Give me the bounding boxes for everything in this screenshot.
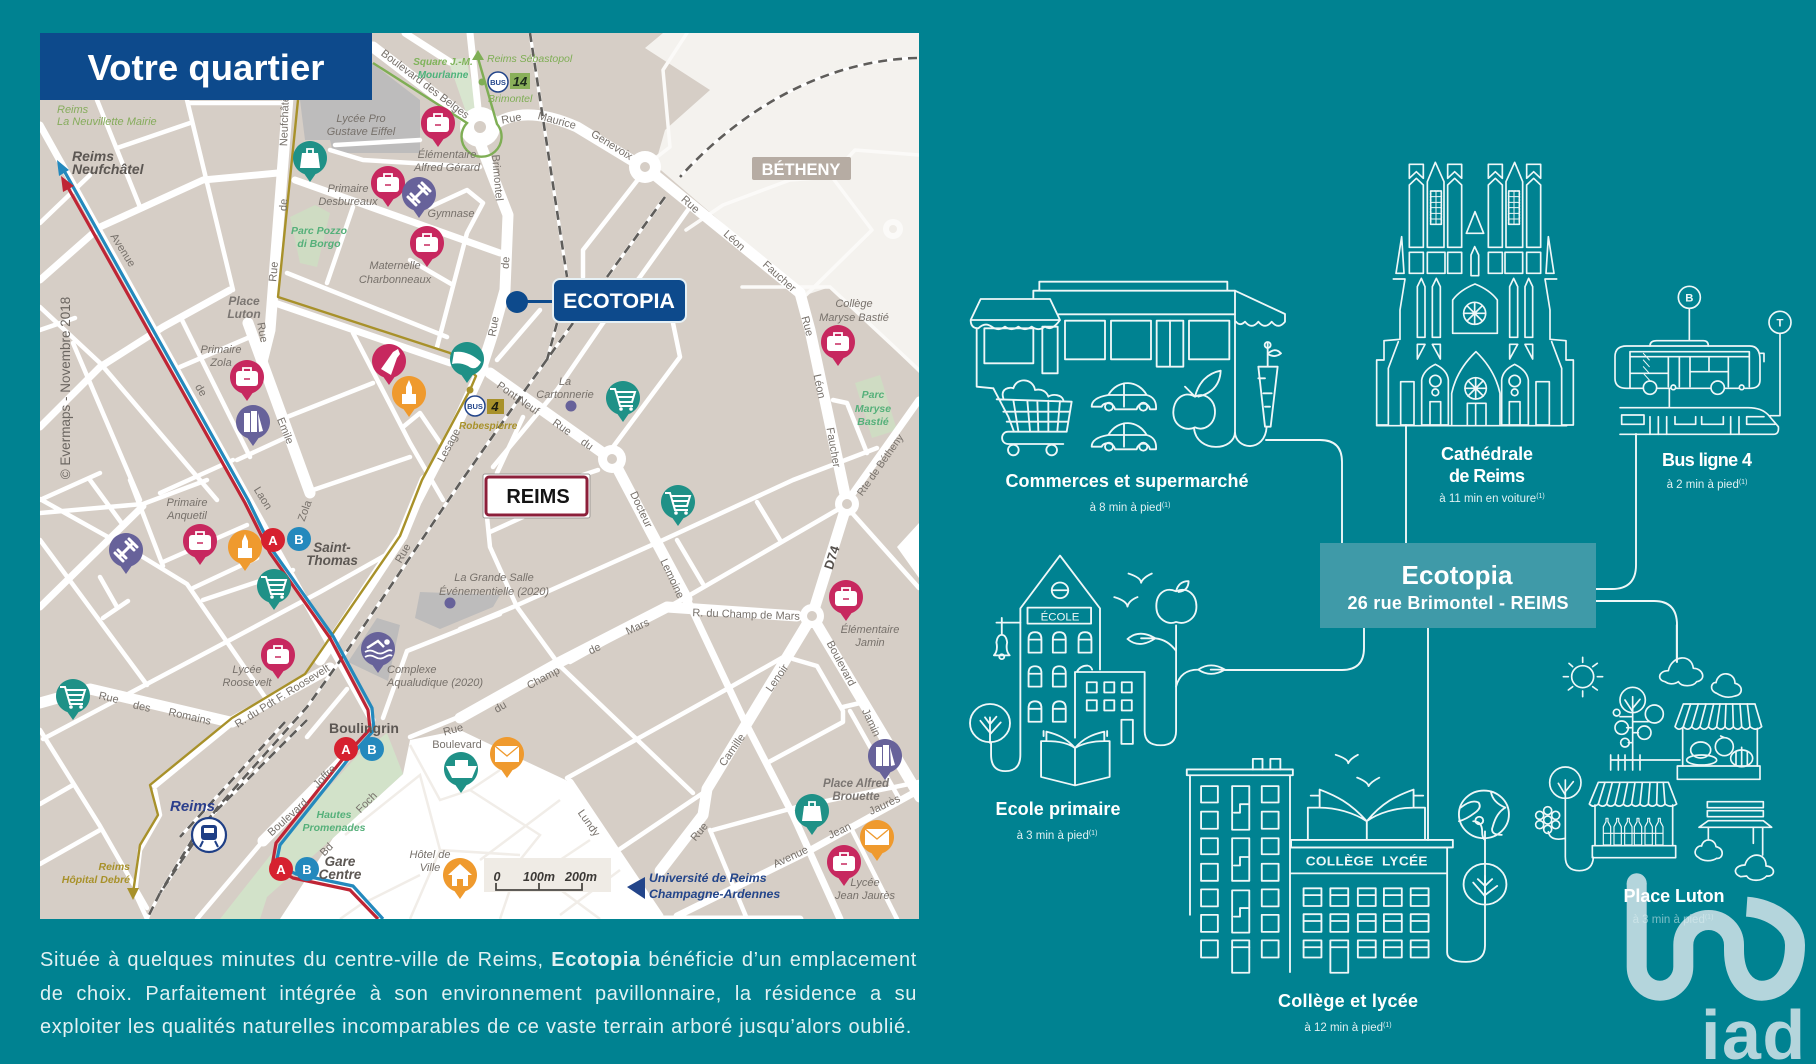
central address box: 26 rue Brimontel - REIMS <box>1348 593 1568 613</box>
street names: Joffre <box>311 763 339 791</box>
university arrow: Champagne-Ardennes <box>649 887 780 901</box>
tram stop badges: B <box>302 862 312 877</box>
street names: Rue <box>254 321 270 343</box>
street names: de <box>278 199 290 211</box>
place labels: Complexe <box>387 664 437 676</box>
label: college and high school: Collège et lycée <box>1278 991 1418 1011</box>
pin: market hall <box>444 752 478 793</box>
bus stop 4 <box>465 396 504 416</box>
district and stop labels: Place Alfred <box>823 778 890 790</box>
pins: schools <box>183 59 863 886</box>
street names: de <box>587 641 603 657</box>
label: shops <box>1006 471 1248 514</box>
text block: description: de choix. Parfaitement intégrée à son environnement pavillonnaire, la résidence a su <box>40 983 917 1005</box>
connector lines <box>1225 425 1677 840</box>
street names: Jaurès <box>867 793 903 818</box>
place labels: Événementielle (2020) <box>439 585 549 598</box>
pin: croissant <box>450 342 484 383</box>
central address box <box>1320 543 1596 628</box>
bus stop dots <box>466 386 474 394</box>
road label D74: D74 <box>821 543 843 571</box>
area: lycée grounds <box>300 63 420 153</box>
tram stop badges: B <box>294 532 304 547</box>
scale bar: 0 <box>494 870 501 884</box>
district and stop labels: Luton <box>227 307 261 321</box>
Bétheny label: BÉTHENY <box>762 160 840 179</box>
place labels <box>166 113 899 902</box>
street names: Genevoix <box>589 128 635 163</box>
street names: Pont Neuf <box>494 380 542 418</box>
place labels: Charbonneaux <box>359 274 432 286</box>
street names: Camille <box>717 732 748 769</box>
park and square labels: Square J.-M. <box>413 57 473 68</box>
street names: Lundy <box>575 808 602 839</box>
label: cathedral: Cathédrale <box>1441 444 1533 464</box>
line terminus labels <box>57 53 573 886</box>
label: bus: à 2 min à pied <box>1667 479 1739 491</box>
place labels: Lycée Pro <box>336 113 386 125</box>
street names: Brimontel <box>489 154 505 201</box>
street names: Boulevard <box>432 739 482 751</box>
district and stop labels: Neufchâtel <box>72 161 145 177</box>
label: college and high school <box>1278 991 1418 1034</box>
place labels: Desbureaux <box>318 196 378 208</box>
place labels: Élémentaire <box>841 623 899 636</box>
park and square labels: Mourlanne <box>418 70 469 81</box>
text block: description: exploiter les qualités naturelles incomparables de ce vaste terrain arboré jusqu’alors oublié. <box>40 1016 912 1038</box>
bus line 4 arrow <box>127 888 139 900</box>
street names: Faucher <box>824 427 842 469</box>
icon: cathedral <box>1377 162 1573 426</box>
tram stop badges: B <box>367 742 377 757</box>
street names: Léon <box>811 373 827 400</box>
label: cathedral: de Reims <box>1449 466 1525 486</box>
central address box: Ecotopia <box>1402 560 1513 590</box>
street names: Léon <box>721 228 747 253</box>
bus stop 4: BUS <box>467 402 483 411</box>
label: Place Luton: Place Luton <box>1624 886 1724 906</box>
line terminus labels: La Neuvillette Mairie <box>57 116 157 128</box>
place labels: Lycée <box>232 664 262 676</box>
bus line 14 route <box>373 58 502 157</box>
district and stop labels: Thomas <box>306 553 358 568</box>
pin: pharmacy bottle <box>372 344 406 385</box>
street names: Rue <box>442 722 465 739</box>
place labels: Jean Jaurès <box>834 890 895 902</box>
line terminus labels: Reims Sébastopol <box>487 53 573 65</box>
street names: Rue <box>486 315 502 337</box>
tram arrow red <box>61 176 74 192</box>
street names: Zola <box>296 498 315 523</box>
street names: Jamin <box>859 707 882 739</box>
street names: Lemoine <box>657 557 686 600</box>
icon: primary school <box>970 556 1225 785</box>
street names: Boulevard <box>266 797 310 839</box>
street names: Boulevard <box>824 639 858 688</box>
street names: des <box>132 699 152 715</box>
street names: Avenue <box>108 231 137 269</box>
place labels: Lycée <box>850 877 880 889</box>
train station: Reims <box>170 798 215 815</box>
place labels: Zola <box>209 357 232 369</box>
scale bar <box>484 858 611 892</box>
park and square labels: di Borgo <box>297 238 341 250</box>
place labels: La Grande Salle <box>454 572 534 584</box>
pin: town hall <box>443 858 477 899</box>
tram arrow blue <box>57 160 69 176</box>
label: shops: (1) <box>1162 502 1170 509</box>
icon: Place Luton market <box>1536 625 1773 880</box>
street names: Bd <box>318 841 336 859</box>
street names: Maurice <box>536 110 577 132</box>
label: primary school: à 3 min à pied <box>1017 830 1089 842</box>
place labels: Élémentaire <box>418 148 476 161</box>
Bétheny label <box>752 157 851 180</box>
tram stop badges: A <box>276 862 286 877</box>
area: parc Pozzo di Borgo <box>290 205 330 267</box>
bus stop 14 <box>478 72 530 92</box>
bus stop 14: 14 <box>513 74 528 89</box>
Ecotopia marker: ECOTOPIA <box>563 289 675 313</box>
roundabouts <box>460 107 903 628</box>
place labels: Primaire <box>167 497 207 509</box>
district and stop labels <box>72 148 890 882</box>
district and stop labels: Saint- <box>313 540 351 555</box>
place labels: Maternelle <box>369 260 421 272</box>
tram stop badges: A <box>341 742 351 757</box>
label: cathedral <box>1439 444 1545 505</box>
street names: Docteur <box>627 490 654 530</box>
label: Place Luton: (1) <box>1705 914 1713 921</box>
street names: Rue <box>267 261 281 282</box>
label: bus: (1) <box>1739 479 1747 486</box>
street names: Jean <box>826 821 853 842</box>
district and stop labels: Centre <box>319 867 362 882</box>
tram stop badges <box>261 527 384 881</box>
place labels: Primaire <box>328 183 368 195</box>
label: shops: à 8 min à pied <box>1090 502 1162 514</box>
street names: Neufchâtel <box>278 93 292 146</box>
icon: shops and supermarket <box>971 282 1285 455</box>
bus stop 4: 4 <box>490 399 499 414</box>
park and square labels: Promenades <box>302 822 366 834</box>
street names: R. du Champ de Mars <box>692 607 801 623</box>
street names: Lesage <box>436 427 463 464</box>
street names <box>97 48 907 871</box>
label: cathedral: à 11 min en voiture <box>1439 493 1536 505</box>
place labels: Cartonnerie <box>536 389 594 401</box>
Reims sign <box>483 474 590 518</box>
park and square labels <box>291 57 891 834</box>
pins: shops <box>56 141 829 835</box>
bus line 4 route <box>133 100 476 893</box>
label: college and high school: (1) <box>1383 1022 1392 1029</box>
title banner <box>40 33 372 100</box>
place labels: Gymnase <box>427 208 475 220</box>
area: square Mourlanne <box>450 58 474 112</box>
park and square labels: Bastié <box>857 416 889 428</box>
area: city centre <box>280 730 660 919</box>
scale bar: 200m <box>564 870 597 884</box>
logo: iad <box>1627 873 1807 1064</box>
label: cathedral: (1) <box>1536 493 1545 500</box>
university arrow: Université de Reims <box>649 871 767 885</box>
tram line blue <box>62 167 383 919</box>
park and square labels: Parc Pozzo <box>291 225 348 237</box>
bus line 14 arrow <box>472 50 484 60</box>
street names: Rte de Bétheny <box>855 432 907 498</box>
street names: du <box>578 436 595 453</box>
scale bar: 100m <box>523 870 555 884</box>
line terminus labels: Brimontel <box>488 93 533 105</box>
district and stop labels: Reims <box>72 148 114 164</box>
street names: Rue <box>97 690 120 706</box>
street names: Faucher <box>760 259 798 295</box>
label: Place Luton <box>1624 886 1724 926</box>
street names: Rue <box>798 315 815 338</box>
place labels: Alfred Gérard <box>413 162 481 174</box>
place labels: Jamin <box>854 637 885 649</box>
area: parc Maryse Bastié <box>855 375 897 438</box>
title banner: Votre quartier <box>88 47 324 88</box>
icon: college and high school <box>1187 755 1509 973</box>
place labels: Roosevelt <box>223 677 272 689</box>
district and stop labels: Boulingrin <box>329 720 399 736</box>
place labels: La <box>559 376 571 388</box>
road network <box>40 33 920 919</box>
district and stop labels: Brouette <box>832 791 880 803</box>
street names: Rue <box>550 417 573 438</box>
line terminus labels: Reims <box>57 104 89 116</box>
pins: sports and libraries <box>109 177 902 780</box>
street names: Romains <box>167 706 213 728</box>
street names: Foch <box>354 790 380 816</box>
park and square labels: Parc <box>862 389 885 401</box>
park and square labels: Maryse <box>855 403 891 415</box>
label: primary school: (1) <box>1089 830 1097 837</box>
icon: bus and tram: T <box>1777 317 1784 329</box>
street names: Champ <box>525 665 562 692</box>
place labels: Aqualudique (2020) <box>386 677 483 689</box>
label: primary school <box>996 799 1120 842</box>
district and stop labels: Place <box>228 294 260 308</box>
label: primary school: Ecole primaire <box>996 799 1120 819</box>
tram line red <box>66 184 378 919</box>
place labels: Maryse Bastié <box>819 312 889 324</box>
street names: de <box>500 256 513 269</box>
Ecotopia marker <box>506 279 686 322</box>
label: bus <box>1662 450 1752 491</box>
street names: Emile <box>274 416 295 446</box>
street names: Laon <box>251 485 274 512</box>
line terminus labels: Hôpital Debré <box>62 874 130 886</box>
pins: churches and post offices <box>228 376 894 861</box>
street names: Rue <box>678 194 702 216</box>
place labels: Anquetil <box>166 510 207 522</box>
street names: Mars <box>624 616 652 638</box>
university arrow <box>627 871 780 901</box>
label: bus: Bus ligne 4 <box>1662 450 1752 470</box>
train station <box>170 798 226 852</box>
place labels: Hôtel de <box>410 849 450 861</box>
venue dots <box>444 400 576 608</box>
label: Place Luton: à 3 min à pied <box>1633 914 1705 926</box>
line terminus labels: Robespierre <box>459 421 518 432</box>
area: event hall grounds <box>415 592 500 629</box>
panel: neighbourhood map <box>40 33 920 919</box>
place labels: Gustave Eiffel <box>327 126 396 138</box>
street names: de <box>192 382 209 399</box>
credit: © Evermaps - Novembre 2018 <box>58 297 73 479</box>
label: college and high school: à 12 min à pied <box>1304 1022 1383 1034</box>
street names: R. du Pdt F. Roosevelt <box>233 662 332 731</box>
text block: description: Située à quelques minutes du centre-ville de Reims, Ecotopia bénéficie d’un emplacement <box>40 949 917 971</box>
bus stop 14: BUS <box>490 78 506 87</box>
street names: Avenue <box>771 844 810 871</box>
area: Bétheny <box>645 33 919 373</box>
place labels: Primaire <box>201 344 241 356</box>
place labels: Ville <box>420 862 440 874</box>
pin: swimming pool <box>361 632 395 673</box>
icon: college and high school: COLLÈGE LYCÉE <box>1306 854 1428 868</box>
line terminus labels: Reims <box>98 861 130 873</box>
district and stop labels: Gare <box>325 854 356 869</box>
street names: Rue <box>393 542 414 565</box>
street names: du <box>492 699 509 716</box>
street names: Lenoir <box>764 662 791 694</box>
railway lines <box>147 33 917 919</box>
park and square labels: Hautes <box>316 809 352 821</box>
area: aquatic centre grounds <box>348 618 400 681</box>
icon: primary school: ÉCOLE <box>1041 610 1079 623</box>
label: shops: Commerces et supermarché <box>1006 471 1248 491</box>
street names: Rue <box>500 111 522 127</box>
street names: Rue <box>689 820 711 844</box>
icon: bus and tram: B <box>1685 292 1693 304</box>
Reims sign: REIMS <box>506 486 570 508</box>
icon: bus and tram <box>1615 286 1791 434</box>
tram stop badges: A <box>268 533 278 548</box>
street names: Boulevard des Belges <box>378 48 472 122</box>
place labels: Collège <box>835 298 873 310</box>
area: Hautes Promenades park <box>220 733 403 919</box>
